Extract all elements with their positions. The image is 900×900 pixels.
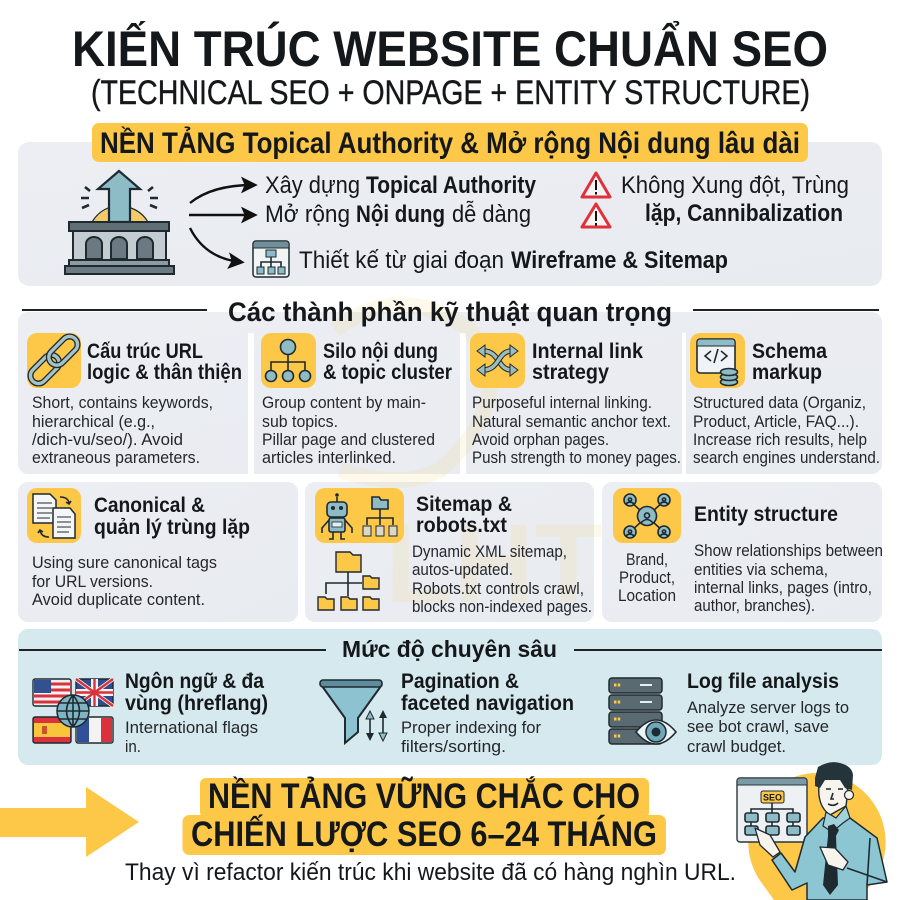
card: entity structure [613, 488, 883, 615]
hreflang text [125, 670, 268, 756]
shirt [772, 818, 887, 900]
log file text: crawl budget. [687, 737, 786, 756]
text: design from wireframe stage [299, 247, 728, 274]
icon: warning triangle 1 [582, 173, 610, 197]
card heading: strategy [532, 361, 609, 384]
card heading: Canonical & [94, 494, 205, 517]
card heading [87, 340, 242, 384]
card heading: Cấu trúc URL [87, 340, 203, 363]
card body text [694, 541, 883, 615]
card: internal link strategy [470, 333, 681, 467]
entity labels: Product, [619, 568, 675, 587]
conclusion subtext: Thay vì refactor kiến trúc khi website đã có hàng nghìn URL. [125, 859, 736, 886]
arrow: large yellow [0, 787, 139, 857]
icon: wireframe sitemap window [253, 241, 289, 277]
sleeve fold [847, 838, 887, 885]
collar [823, 806, 850, 832]
title: KIẾN TRÚC WEBSITE CHUẨN SEO [72, 21, 828, 77]
card heading: Sitemap & [416, 493, 512, 516]
text: build topical authority: Xây dựng [265, 172, 360, 199]
card: silo content [261, 333, 452, 467]
text: expand content: dễ dàng [452, 201, 531, 228]
card body text: /dich-vu/seo/). Avoid [32, 430, 183, 449]
entity labels: Location [618, 586, 676, 605]
icon: warning triangle 2 [582, 204, 610, 227]
hair [815, 762, 853, 790]
panel: topical authority foundation [18, 123, 882, 286]
icon: entity network [613, 488, 681, 543]
card heading [323, 340, 452, 384]
conclusion headline [182, 776, 666, 855]
panel: advanced level [18, 629, 882, 765]
card body text: Short, contains keywords, [32, 393, 213, 412]
card body text: author, branches). [694, 596, 815, 615]
icon: server with eye [609, 678, 676, 744]
icon: duplicate documents [27, 488, 81, 543]
card body text: sub topics. [262, 412, 338, 431]
card: canonical [27, 488, 250, 609]
card body text [412, 542, 592, 616]
hreflang text: International flags [125, 718, 258, 737]
card: schema markup [690, 333, 880, 467]
entity labels [618, 550, 676, 605]
browser window with SEO tree [737, 778, 807, 842]
tie [823, 824, 839, 895]
card body text: Group content by main- [262, 393, 426, 412]
card body text: search engines understand. [693, 448, 880, 467]
card body text: Structured data (Organiz, [693, 393, 866, 412]
panel: component cards background [18, 312, 882, 622]
pagination text: Proper indexing for [401, 718, 541, 737]
log file text: see bot crawl, save [687, 717, 829, 736]
ear [844, 790, 854, 800]
card body text: for URL versions. [32, 572, 153, 591]
card body text: Robots.txt controls crawl, [412, 579, 584, 598]
card body text: Dynamic XML sitemap, [412, 542, 567, 561]
card heading [532, 340, 643, 384]
text: build topical authority: Topical Authority [366, 172, 537, 199]
text: no conflict or cannibalization [621, 172, 849, 227]
text: expand content: Nội dung [356, 201, 445, 228]
card body text: internal links, pages (intro, [694, 578, 872, 597]
card heading: markup [752, 361, 822, 384]
icon: code window and database [690, 333, 745, 388]
card body text: Product, Article, FAQ...). [693, 412, 859, 431]
browser window with SEO tree: SEO [763, 792, 782, 802]
conclusion headline: NỀN TẢNG VỮNG CHẮC CHO [208, 776, 640, 816]
pagination text: faceted navigation [401, 692, 574, 715]
text: no conflict or cannibalization: lặp, Cannibalization [645, 200, 843, 227]
illustration: man presenting SEO sitemap [737, 762, 887, 900]
text: no conflict or cannibalization: Không Xung đột, Trùng [621, 172, 849, 199]
face details [826, 789, 843, 805]
icon: robot and folder tree [315, 488, 404, 543]
log file text: Analyze server logs to [687, 698, 849, 717]
banner heading: NỀN TẢNG Topical Authority & Mở rộng Nội dung lâu dài [100, 126, 800, 160]
card body text: entities via schema, [694, 560, 828, 579]
card body text: extraneous parameters. [32, 448, 200, 467]
hreflang text: vùng (hreflang) [125, 692, 268, 715]
card body text: Using sure canonical tags [32, 553, 217, 572]
card body text: Increase rich results, help [693, 430, 867, 449]
left hand [755, 828, 780, 857]
neck and face [819, 778, 848, 815]
icon: chain link [27, 333, 81, 388]
card heading: & topic cluster [323, 361, 452, 384]
card heading [94, 494, 250, 539]
card body text: blocks non-indexed pages. [412, 597, 592, 616]
watermark [335, 305, 603, 626]
card body text: Push strength to money pages. [472, 448, 681, 467]
card body text: Purposeful internal linking. [472, 393, 652, 412]
card heading: robots.txt [416, 514, 507, 537]
card heading: Silo nội dung [323, 340, 438, 363]
section heading: technical components: Các thành phần kỹ thuật quan trọng [228, 297, 672, 327]
text: design from wireframe stage: Thiết kế từ giai đoạn [299, 247, 504, 274]
card heading [752, 340, 827, 384]
pagination text [401, 670, 574, 756]
card body text [693, 393, 880, 467]
card body text: hierarchical (e.g., [32, 412, 155, 431]
card body text: Natural semantic anchor text. [472, 412, 671, 431]
arrow: to topical authority [190, 185, 253, 203]
log file text: Log file analysis [687, 670, 839, 693]
log file text [687, 670, 849, 756]
card: URL structure [27, 333, 242, 467]
card: sitemap and robots [315, 488, 592, 616]
card heading: quản lý trùng lặp [94, 516, 250, 539]
arrow: to wireframe [190, 228, 240, 262]
hreflang text: Ngôn ngữ & đa [125, 670, 264, 693]
right hand [820, 847, 848, 870]
card heading: Internal link [532, 340, 643, 363]
icon: flags and globe [33, 679, 113, 743]
watermark: LHT [385, 501, 603, 626]
card heading: Entity structure [694, 503, 838, 526]
card body text [472, 393, 681, 467]
card body text: Pillar page and clustered [262, 430, 435, 449]
text: expand content: Mở rộng [265, 201, 350, 228]
card body text [32, 553, 217, 609]
card body text: Avoid orphan pages. [472, 430, 609, 449]
icon: folder tree [318, 552, 379, 610]
hreflang text: in. [125, 737, 141, 756]
icon: topic hierarchy [261, 333, 316, 388]
card body text [32, 393, 213, 467]
section heading: depth: Mức độ chuyên sâu [342, 636, 557, 662]
conclusion headline: CHIẾN LƯỢC SEO 6–24 THÁNG [191, 814, 657, 854]
arrow: to content expansion [189, 214, 253, 216]
card body text: Show relationships between [694, 541, 883, 560]
card body text [262, 393, 435, 467]
card heading [416, 493, 512, 537]
text: expand content [265, 201, 531, 228]
card body text: Avoid duplicate content. [32, 590, 205, 609]
icon: building with rising arrow [65, 171, 174, 274]
entity labels: Brand, [626, 550, 668, 569]
card body text: autos-updated. [412, 560, 513, 579]
icon: filter funnel [320, 680, 387, 743]
icon: crossing arrows [470, 333, 525, 388]
pagination text: filters/sorting. [401, 737, 506, 756]
pagination text: Pagination & [401, 670, 519, 693]
text: build topical authority [265, 172, 537, 199]
card body text: articles interlinked. [262, 448, 396, 467]
card heading: logic & thân thiện [87, 361, 242, 384]
text: design from wireframe stage: Wireframe & Sitemap [511, 247, 728, 274]
card heading: Schema [752, 340, 827, 363]
